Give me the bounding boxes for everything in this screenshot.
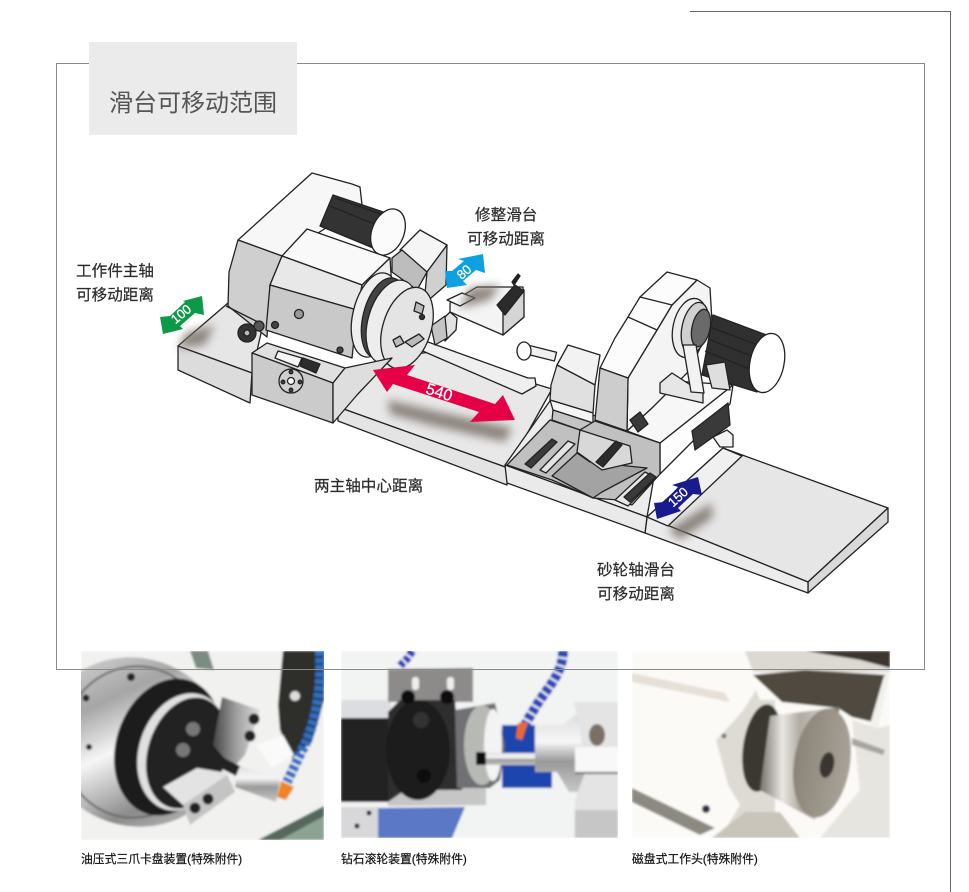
arrow: headstock slide 100	[160, 296, 204, 334]
caption: hydraulic chuck: 油压式三爪卡盘装置(特殊附件)	[81, 852, 242, 866]
rear hood	[238, 173, 362, 256]
right base and sliding plate	[505, 398, 888, 593]
photo: diamond roller unit	[341, 651, 618, 838]
label: headstock slide	[76, 262, 154, 304]
grinding slide tray	[507, 420, 660, 506]
arrow: grinding slide 150: 150	[665, 484, 691, 510]
grinding motor	[702, 315, 790, 396]
grinding wheel arch	[595, 272, 733, 474]
right housing	[357, 258, 392, 345]
motor highlight lines	[330, 198, 392, 228]
photo: hydraulic three-jaw chuck	[81, 651, 324, 840]
label: grinding wheel slide: 砂轮轴滑台	[597, 561, 675, 579]
panel frame	[56, 64, 924, 670]
dresser slide assembly	[431, 274, 524, 345]
arrow: grinding slide 150	[654, 477, 702, 519]
label: headstock slide: 可移动距离	[76, 286, 154, 304]
label: dresser slide: 修整滑台	[475, 206, 537, 224]
front control box	[252, 343, 392, 423]
photo: magnetic chuck workhead	[632, 651, 890, 838]
handwheel	[226, 306, 264, 342]
arrow: headstock slide 100: 100	[168, 301, 194, 327]
label: dresser slide: 可移动距离	[467, 230, 545, 248]
grinding spindle	[517, 342, 600, 430]
arrow: dresser slide 80	[445, 254, 485, 288]
label: headstock slide: 工作件主轴	[76, 262, 154, 280]
front hood	[282, 229, 390, 285]
spindle drive and pulleys	[660, 295, 714, 403]
caption: magnetic workhead: 磁盘式工作头(特殊附件)	[632, 852, 758, 866]
arrow shadows	[178, 285, 712, 540]
motor body	[320, 195, 395, 250]
arrow: centre distance 540	[373, 365, 515, 422]
top band	[270, 256, 362, 310]
left machine base slabs	[178, 303, 552, 485]
title block: 滑台可移动范围	[109, 90, 277, 117]
rail on middle bed	[418, 342, 536, 394]
chuck	[343, 268, 443, 375]
left housing	[228, 240, 282, 337]
caption: diamond roller: 钻石滚轮装置(特殊附件)	[341, 852, 467, 866]
label: grinding wheel slide	[597, 561, 675, 603]
label: dresser slide	[467, 206, 545, 248]
guard terminal rail	[692, 403, 733, 450]
arrow: dresser slide 80: 80	[454, 262, 474, 282]
page corner rule	[690, 12, 950, 892]
dresser column	[392, 230, 447, 304]
arrow: centre distance 540: 540	[424, 381, 454, 405]
label: grinding wheel slide: 可移动距离	[597, 585, 675, 603]
motor end cap	[364, 204, 412, 260]
title block	[89, 42, 297, 135]
left headstock	[228, 173, 412, 358]
front housing	[266, 285, 357, 358]
label: distance between spindles: 两主轴中心距离	[314, 477, 423, 495]
